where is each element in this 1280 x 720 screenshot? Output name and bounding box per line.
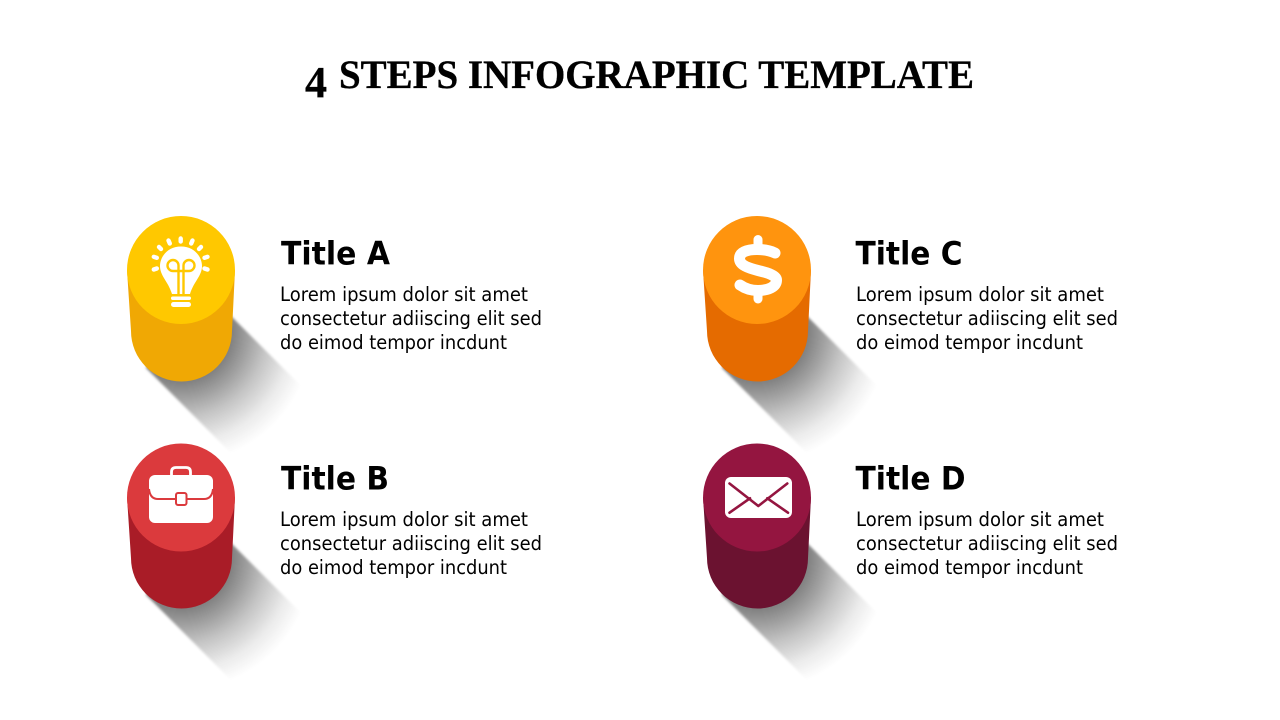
cylinder body C <box>703 270 811 382</box>
icon: dollar sign <box>740 240 776 299</box>
cylinder top D <box>703 444 811 552</box>
icon: briefcase <box>149 468 213 523</box>
heading: Title C: Title C <box>856 234 962 272</box>
text block C: do eimod tempor incdunt <box>856 331 1083 354</box>
text block B: Lorem ipsum dolor sit amet <box>280 508 528 531</box>
cylinder shadow D <box>722 502 908 695</box>
text block C <box>856 283 1118 354</box>
text block B: do eimod tempor incdunt <box>280 556 507 579</box>
text block D: consectetur adiiscing elit sed <box>856 532 1118 555</box>
icon: envelope <box>725 477 792 518</box>
cylinder body A <box>127 270 235 382</box>
text block C: consectetur adiiscing elit sed <box>856 307 1118 330</box>
text block B <box>280 508 542 579</box>
panel: step C <box>703 216 1118 468</box>
text block D: do eimod tempor incdunt <box>856 556 1083 579</box>
heading: Title B: Title B <box>281 460 389 498</box>
cylinder body D <box>703 497 811 608</box>
title: 4 <box>305 58 327 107</box>
cylinder shadow C <box>722 275 908 468</box>
text block B: consectetur adiiscing elit sed <box>280 532 542 555</box>
text block A: consectetur adiiscing elit sed <box>280 307 542 330</box>
cylinder body B <box>127 497 235 608</box>
cylinder top C <box>703 216 811 324</box>
text block D: Lorem ipsum dolor sit amet <box>856 508 1104 531</box>
panel: step A <box>127 216 542 468</box>
cylinder shadow B <box>146 502 332 695</box>
cylinder shadow A <box>146 275 332 468</box>
text block A: Lorem ipsum dolor sit amet <box>280 283 528 306</box>
icon: light bulb <box>154 238 208 307</box>
text block A: do eimod tempor incdunt <box>280 331 507 354</box>
heading: Title D: Title D <box>856 460 966 498</box>
cylinder top A <box>127 216 235 324</box>
cylinder top B <box>127 444 235 552</box>
title: STEPS INFOGRAPHIC TEMPLATE <box>339 52 974 97</box>
heading: Title A: Title A <box>281 234 390 272</box>
text block C: Lorem ipsum dolor sit amet <box>856 283 1104 306</box>
panel: step B <box>127 444 542 695</box>
text block D <box>856 508 1118 579</box>
panel: step D <box>703 444 1118 695</box>
text block A <box>280 283 542 354</box>
